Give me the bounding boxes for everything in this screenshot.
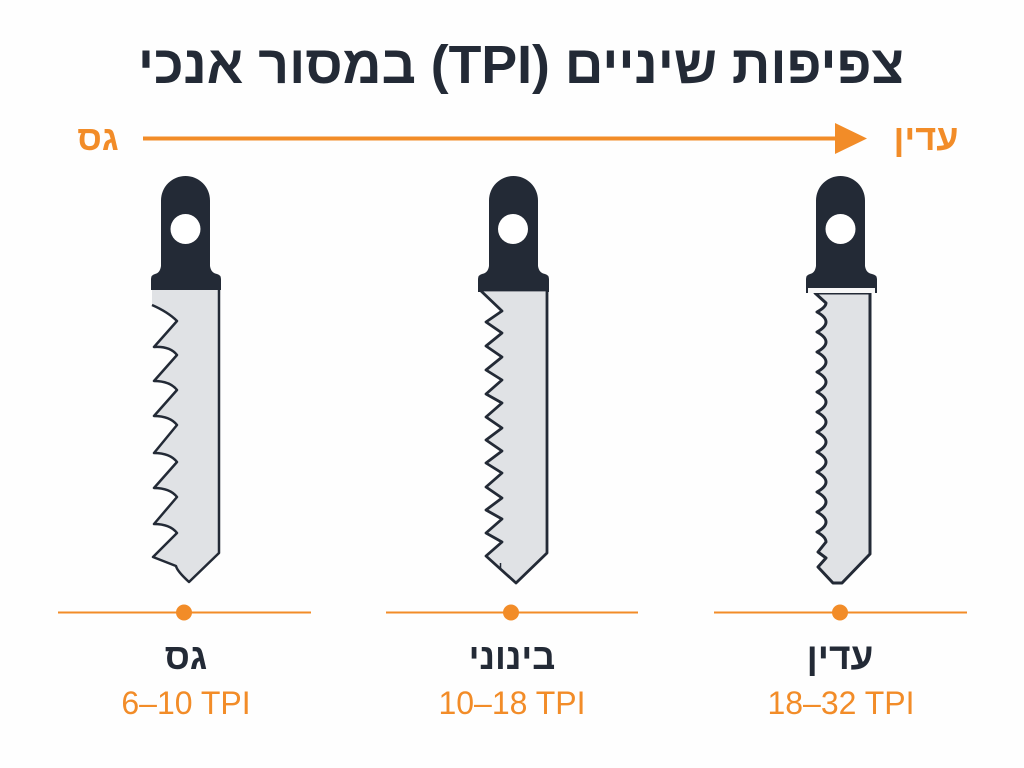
blade lip [808,288,875,293]
blade body [480,290,547,583]
blade body [152,290,219,582]
TPI range: 18–32 TPI [767,685,915,721]
scale arrow: coarse to fine [77,117,958,158]
blade: medium [478,176,549,583]
name: בינוני [469,636,555,677]
arrow [143,123,867,154]
blade body [815,293,870,583]
name: עדין [807,636,873,677]
label: fine: עדין [894,117,958,158]
mounting hole [498,214,528,244]
blade tang [478,176,549,292]
caption: coarse [58,604,311,721]
blade tang [151,176,221,290]
name: גס [165,636,207,677]
blade outline [152,290,219,582]
TPI range: 10–18 TPI [438,685,586,721]
marker line [714,604,967,620]
label: coarse: גס [77,119,119,158]
TPI range: 6–10 TPI [121,685,251,721]
mounting hole [170,214,200,244]
caption: fine [714,604,967,721]
blade tang [806,176,877,293]
marker line [58,604,311,620]
mounting hole [826,214,856,244]
title: צפיפות שיניים (TPI) במסור אנכי [138,35,904,95]
caption: medium [386,604,638,721]
marker line [386,604,638,620]
blade: fine [806,176,877,583]
blade: coarse [151,176,221,582]
blade tick [500,563,502,570]
